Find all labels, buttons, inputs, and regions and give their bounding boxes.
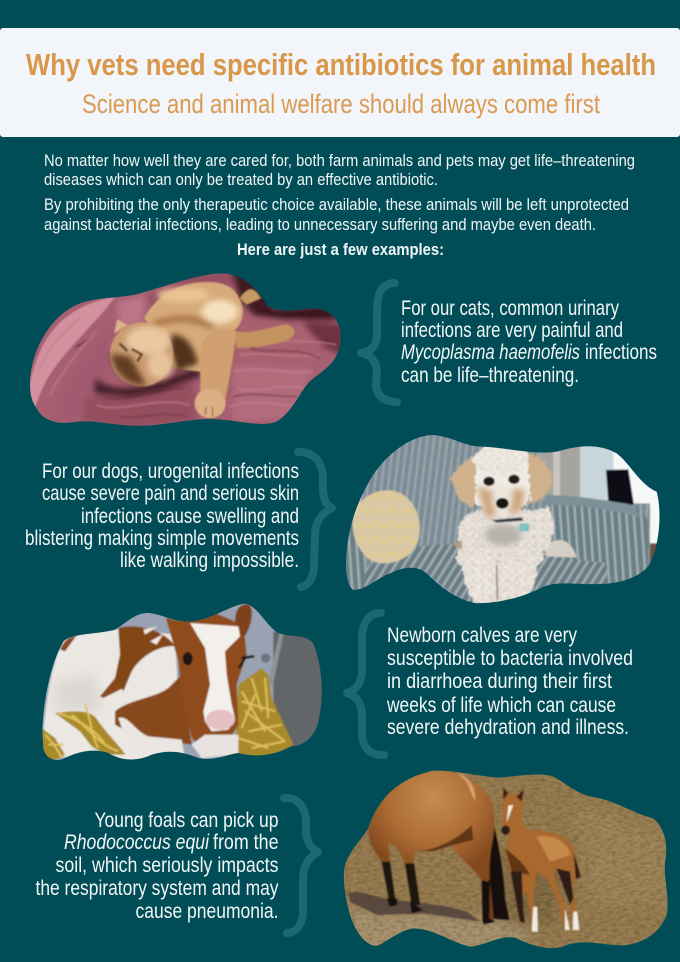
intro text <box>44 151 635 259</box>
text: cats: can be life–threatening. <box>401 364 579 387</box>
photo: cat on pink bedding <box>30 273 341 426</box>
intro text: against bacterial infections, leading to unnecessary suffering and maybe even death. <box>44 215 596 234</box>
text: dogs: cause severe pain and serious skin <box>42 482 299 505</box>
lead-in line: Here are just a few examples: <box>237 240 444 259</box>
text: dogs: blistering making simple movements <box>25 527 299 550</box>
text: dogs <box>25 460 299 572</box>
photo: calf in straw <box>42 604 322 760</box>
text: cats: infections <box>585 341 657 364</box>
text: foals: the respiratory system and may <box>36 877 279 900</box>
text: calves: severe dehydration and illness. <box>387 716 629 739</box>
text: foals: soil, which seriously impacts <box>56 854 278 877</box>
text: calves: in diarrhoea during their first <box>387 670 612 693</box>
text: dogs: infections cause swelling and <box>81 505 299 528</box>
intro text: diseases which can only be treated by an effective antibiotic. <box>44 170 438 189</box>
header banner <box>0 28 680 137</box>
text: foals: cause pneumonia. <box>136 900 278 923</box>
text: cats: Mycoplasma haemofelis <box>401 341 580 364</box>
text: dogs: like walking impossible. <box>120 549 299 572</box>
photo: dog on armchair <box>346 435 660 604</box>
text: foals: from the <box>213 831 278 854</box>
photo: mare and foal on grass <box>340 765 675 955</box>
brace: calf <box>347 613 384 755</box>
text: calves <box>386 624 633 739</box>
text: dogs: For our dogs, urogenital infections <box>42 460 299 483</box>
text: cats <box>401 297 657 387</box>
text: foals: Rhodococcus equi <box>64 831 210 854</box>
text: calves: susceptible to bacteria involved <box>387 647 633 670</box>
brace: foal <box>284 798 318 933</box>
text: cats: For our cats, common urinary <box>401 297 619 320</box>
intro text: By prohibiting the only therapeutic choice available, these animals will be left unprotected <box>44 195 629 214</box>
text: calves: Newborn calves are very <box>387 624 577 647</box>
text: foals: Young foals can pick up <box>94 809 278 832</box>
text: cats: infections are very painful and <box>401 319 623 342</box>
brace: dog <box>298 452 332 587</box>
text: foals <box>36 809 279 923</box>
brace: cat <box>361 283 397 402</box>
text: calves: weeks of life which can cause <box>386 694 616 717</box>
